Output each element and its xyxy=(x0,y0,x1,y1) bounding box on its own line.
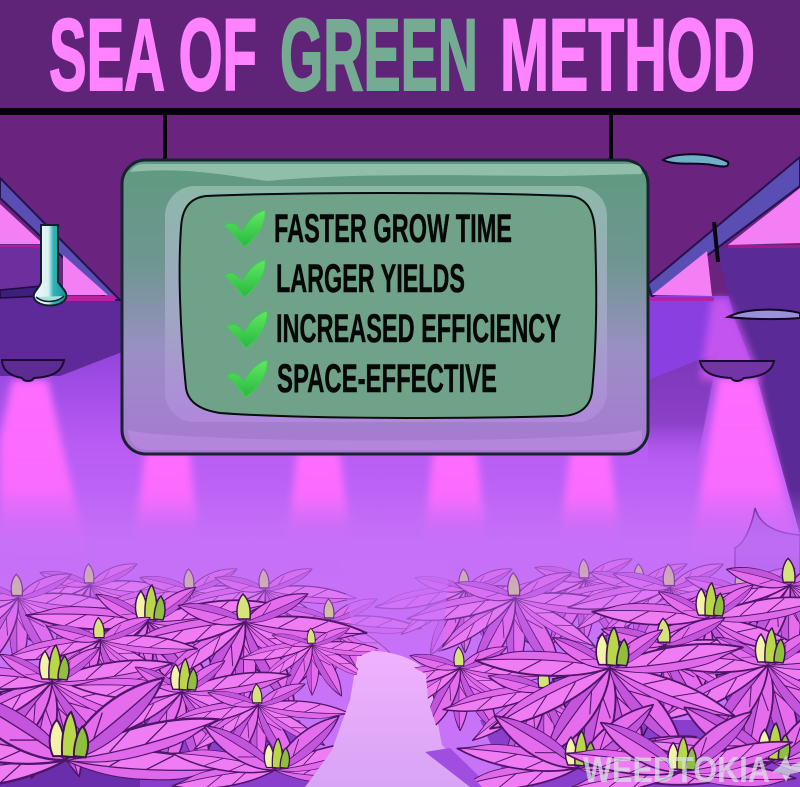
item: larger yields: LARGER YIELDS xyxy=(276,257,465,301)
plants: left back row xyxy=(0,559,422,689)
light beam: right xyxy=(690,378,800,560)
item: increased efficiency xyxy=(227,307,561,351)
icon: left wall pipe xyxy=(34,225,66,306)
header band xyxy=(0,0,800,108)
icon: left ceiling lamp xyxy=(2,360,64,381)
light beams under the board xyxy=(135,452,620,538)
plants: right back row xyxy=(374,508,800,681)
plants: left foreground xyxy=(0,582,386,787)
item: space-effective xyxy=(227,357,497,401)
icon: ceiling vent xyxy=(663,154,728,167)
icon: right ceiling lamp xyxy=(700,361,774,381)
floor xyxy=(305,651,482,787)
sign screen xyxy=(180,193,596,418)
item: faster grow time: FASTER GROW TIME xyxy=(274,207,512,251)
item: faster grow time xyxy=(225,207,512,251)
plants: right foreground xyxy=(410,557,800,787)
item: increased efficiency: INCREASED EFFICIENCY xyxy=(276,307,561,351)
light beam: left xyxy=(0,380,88,560)
checklist xyxy=(225,207,561,401)
ceiling bar xyxy=(0,108,800,115)
fog over back rows xyxy=(0,490,800,660)
icon: watermark leaf xyxy=(772,755,800,782)
hanging wires xyxy=(165,115,611,162)
haze over centre aisle xyxy=(340,560,450,672)
left ceiling window structure xyxy=(0,178,120,301)
side light beam from post xyxy=(700,298,762,380)
title: GREEN xyxy=(280,0,478,112)
right ceiling window structure xyxy=(648,157,800,319)
title xyxy=(49,0,755,112)
floor shadow xyxy=(425,748,490,787)
sign board xyxy=(122,160,648,454)
item: space-effective: SPACE-EFFECTIVE xyxy=(277,357,497,401)
title: SEA OF xyxy=(49,0,257,112)
item: larger yields xyxy=(225,257,465,301)
